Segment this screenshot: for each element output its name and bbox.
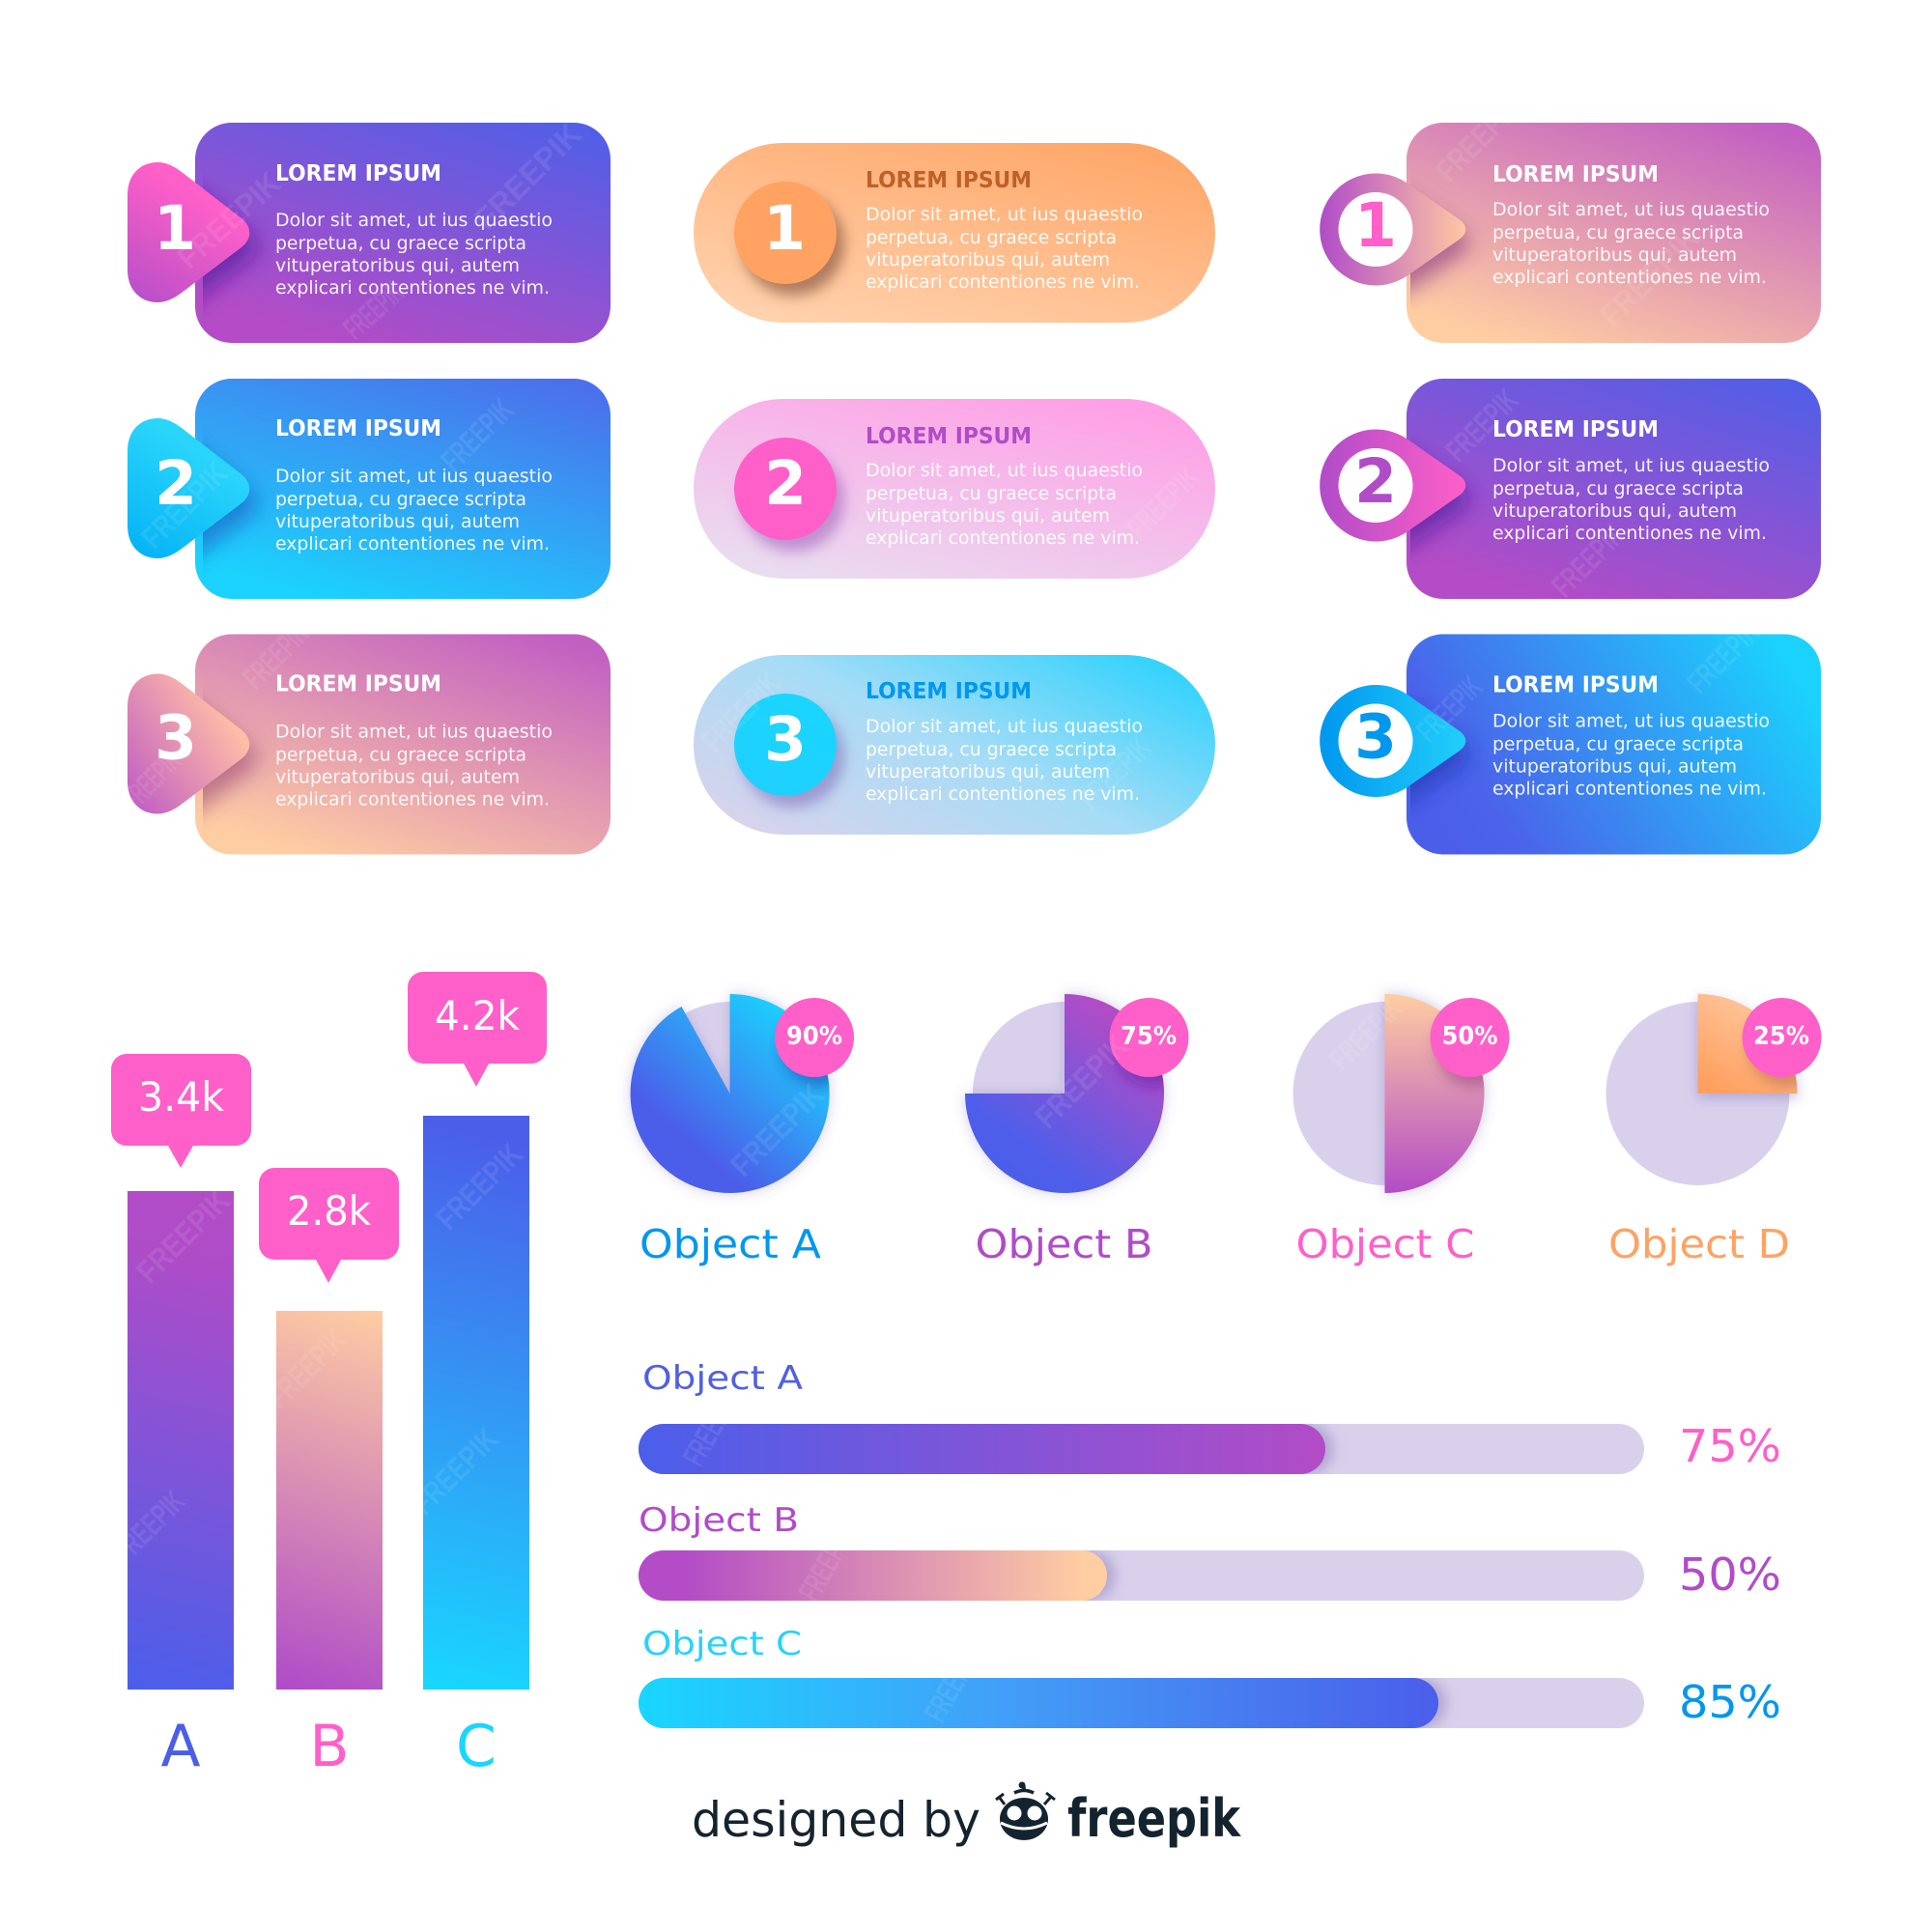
text: FREEPIK (695, 665, 788, 758)
text: FREEPIK (236, 615, 316, 696)
progress bar: Object C 85%: Object C (642, 1625, 802, 1663)
panel: right card 1: 1 (1354, 190, 1397, 261)
panel: right card 1: LOREM IPSUM (1492, 162, 1659, 187)
panel: right card 1: explicari contentiones ne vim. (1492, 267, 1767, 288)
panel: right card 2: LOREM IPSUM (1492, 417, 1659, 442)
panel: left card 1: LOREM IPSUM (275, 161, 441, 186)
text: FREEPIK (260, 1321, 354, 1415)
panel: middle pill 3: LOREM IPSUM (866, 679, 1032, 704)
panel: right card 3: explicari contentiones ne vim. (1492, 779, 1767, 800)
panel: left card 1 (128, 123, 611, 343)
panel: middle pill 3: Dolor sit amet, ut ius quaestio (866, 716, 1143, 737)
panel: middle pill 3: vituperatoribus qui, autem (866, 761, 1110, 782)
panel: left card 1: 1 (154, 193, 196, 264)
panel: middle pill 2 (694, 399, 1215, 579)
bar B with callout: B (309, 1713, 350, 1780)
panel: left card 2: Dolor sit amet, ut ius quaestio (275, 466, 553, 487)
panel: right card 3: vituperatoribus qui, autem (1492, 755, 1737, 777)
panel: middle pill 1: vituperatoribus qui, autem (866, 249, 1110, 270)
bar A with callout: 3.4k (138, 1073, 225, 1121)
panel: right card 1: perpetua, cu graece scripta (1492, 222, 1744, 243)
panel: left card 3: vituperatoribus qui, autem (275, 767, 520, 788)
panel: left card 2: explicari contentiones ne vim. (275, 533, 550, 554)
text: FREEPIK (1545, 517, 1632, 604)
panel: middle pill 3: 3 (764, 704, 807, 775)
text: FREEPIK (1593, 219, 1707, 333)
panel: left card 2 (128, 379, 611, 599)
text: FREEPIK (405, 1421, 505, 1521)
panel: right card 2: explicari contentiones ne vim. (1492, 523, 1767, 544)
text: FREEPIK (1438, 382, 1525, 469)
panel: left card 1: explicari contentiones ne vim. (275, 277, 550, 298)
footer credit (692, 1781, 1241, 1849)
panel: left card 3: perpetua, cu graece scripta (275, 744, 526, 765)
progress bar: Object A 75%: 75% (1679, 1420, 1781, 1472)
text: FREEPIK (1322, 990, 1409, 1077)
panel: left card 3 (128, 634, 611, 854)
progress bar: Object B 50%: 50% (1679, 1548, 1781, 1601)
panel: right card 2: Dolor sit amet, ut ius quaestio (1492, 455, 1770, 476)
panel: middle pill 2: vituperatoribus qui, autem (866, 505, 1110, 526)
panel: middle pill 2: LOREM IPSUM (866, 424, 1032, 449)
pie chart: Object B 75% (965, 994, 1194, 1267)
text: FREEPIK (429, 1136, 529, 1236)
text: FREEPIK (1429, 88, 1529, 188)
panel: left card 2: perpetua, cu graece scripta (275, 489, 526, 510)
panel: left card 1: Dolor sit amet, ut ius quaestio (275, 210, 553, 231)
text: FREEPIK (724, 1076, 831, 1183)
footer credit: designed by (692, 1792, 980, 1848)
footer credit: freepik (1067, 1788, 1241, 1849)
progress bar: Object C 85% (639, 1625, 1781, 1728)
panel: right card 2: 2 (1354, 446, 1397, 517)
text: FREEPIK (129, 1182, 237, 1290)
panel: middle pill 1: perpetua, cu graece scripta (866, 227, 1117, 248)
panel: left card 3: Dolor sit amet, ut ius quaestio (275, 721, 553, 742)
panel: right card 1: vituperatoribus qui, autem (1492, 244, 1737, 266)
panel: left card 1: perpetua, cu graece scripta (275, 233, 526, 254)
bar B with callout (259, 1168, 399, 1780)
panel: right card 3: Dolor sit amet, ut ius quaestio (1492, 711, 1770, 732)
bar chart (111, 972, 547, 1780)
panel: right card 2: vituperatoribus qui, autem (1492, 500, 1737, 522)
text: FREEPIK (170, 165, 287, 275)
pie chart: Object C 50%: 50% (1441, 1022, 1497, 1051)
panel: middle pill 1: explicari contentiones ne vim. (866, 271, 1140, 293)
panel: middle pill 2: perpetua, cu graece scripta (866, 483, 1117, 504)
panel: middle pill 3: perpetua, cu graece scripta (866, 739, 1117, 760)
panel: left card 2: LOREM IPSUM (275, 416, 441, 441)
bar C with callout: 4.2k (435, 992, 521, 1039)
panel: left card 3: LOREM IPSUM (275, 672, 441, 697)
panel: middle pill 2: explicari contentiones ne vim. (866, 527, 1140, 549)
text: FREEPIK (336, 274, 411, 346)
panel: right card 3: 3 (1354, 701, 1397, 773)
panel: left card 1: vituperatoribus qui, autem (275, 255, 520, 276)
panel: middle pill 1: LOREM IPSUM (866, 168, 1032, 193)
pie chart: Object C 50% (1293, 994, 1515, 1267)
progress bar: Object B 50% (639, 1501, 1781, 1601)
pie chart: Object A 90% (631, 994, 860, 1267)
pie chart: Object D 25%: 25% (1753, 1022, 1809, 1051)
text: FREEPIK (1120, 459, 1207, 546)
bar C with callout: C (456, 1713, 497, 1780)
bar A with callout: A (160, 1713, 201, 1780)
panel: middle pill 1: Dolor sit amet, ut ius quaestio (866, 204, 1143, 225)
progress bar: Object C 85%: 85% (1679, 1676, 1781, 1728)
text: FREEPIK (791, 1522, 861, 1607)
panel: middle pill 3: explicari contentiones ne vim. (866, 783, 1140, 805)
text: FREEPIK (468, 116, 588, 237)
pie chart: Object B 75%: Object B (976, 1221, 1153, 1267)
bar B with callout: 2.8k (287, 1187, 372, 1235)
text: FREEPIK (1409, 668, 1490, 749)
text: FREEPIK (115, 743, 188, 816)
text: FREEPIK (917, 1643, 986, 1727)
pie chart: Object D 25% (1605, 994, 1827, 1267)
panel: left card 2: 2 (155, 448, 197, 519)
panel: left card 2: vituperatoribus qui, autem (275, 511, 520, 532)
panel: left card 3: 3 (155, 703, 197, 773)
pie chart: Object A 90%: 90% (786, 1022, 842, 1051)
icon: freepik robot (996, 1781, 1055, 1840)
text: FREEPIK (1028, 1028, 1135, 1135)
panel: middle pill 1: 1 (763, 193, 806, 264)
panel: middle pill 2: 2 (764, 448, 807, 519)
panel: right card 1 (1320, 123, 1821, 343)
pie chart: Object C 50%: Object C (1296, 1221, 1474, 1267)
panel: right card 3: perpetua, cu graece scripta (1492, 734, 1744, 755)
pie chart: Object B 75%: 75% (1121, 1022, 1177, 1051)
progress bar: Object A 75% (639, 1359, 1781, 1474)
text: FREEPIK (1071, 729, 1158, 816)
pie chart: Object D 25%: Object D (1608, 1221, 1790, 1267)
panel: middle pill 2: Dolor sit amet, ut ius quaestio (866, 460, 1143, 481)
bar A with callout (111, 1054, 251, 1780)
panel: middle pill 1 (694, 143, 1215, 323)
text: FREEPIK (105, 1483, 192, 1570)
panel: right card 3 (1320, 634, 1821, 854)
text: FREEPIK (675, 1387, 745, 1472)
panel: right card 2 (1320, 379, 1821, 599)
panel: middle pill 3 (694, 655, 1215, 835)
progress bar: Object B 50%: Object B (639, 1501, 799, 1540)
text: FREEPIK (134, 455, 235, 555)
pie chart: Object A 90%: Object A (639, 1221, 821, 1267)
panel: right card 3: LOREM IPSUM (1492, 672, 1659, 697)
text: FREEPIK (1680, 613, 1767, 700)
progress bar: Object A 75%: Object A (642, 1359, 803, 1398)
bar C with callout (408, 972, 547, 1780)
text: FREEPIK (434, 391, 521, 478)
panel: right card 2: perpetua, cu graece scripta (1492, 478, 1744, 499)
panel: left card 3: explicari contentiones ne vim. (275, 788, 550, 810)
panel: right card 1: Dolor sit amet, ut ius quaestio (1492, 199, 1770, 220)
